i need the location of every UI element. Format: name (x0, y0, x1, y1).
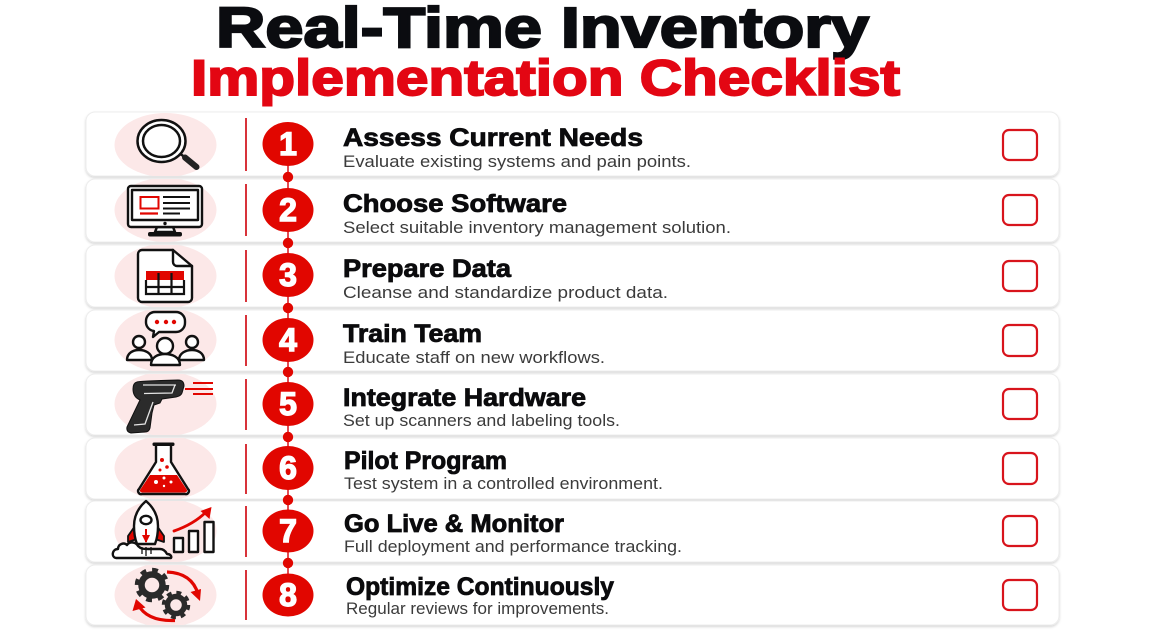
panel: step 7 (86, 499, 1059, 563)
step text: Assess Current Needs (343, 124, 643, 152)
step text (343, 190, 731, 237)
number badge 4: 4 (279, 322, 297, 358)
checkbox (1003, 325, 1037, 356)
icon: team with speech bubble (127, 312, 204, 365)
step text: Evaluate existing systems and pain points. (343, 153, 691, 171)
number badge 6 (262, 446, 314, 490)
number badge 7: 7 (279, 513, 297, 549)
checkbox (1003, 130, 1037, 160)
step text: Cleanse and standardize product data. (343, 284, 668, 302)
panel: step 4 (86, 308, 1059, 372)
number badge 3 (262, 253, 314, 297)
icon: gears with cycle arrows (132, 570, 201, 621)
step text (343, 384, 620, 430)
checkbox (1003, 453, 1037, 484)
number badge 2 (262, 188, 314, 232)
step text (344, 510, 682, 556)
number badge 3: 3 (279, 257, 297, 293)
number badge 8: 8 (279, 577, 297, 613)
icon: barcode scanner (127, 380, 213, 433)
step text: Prepare Data (343, 255, 512, 283)
icon: computer monitor (128, 186, 202, 236)
step text: Optimize Continuously (346, 573, 614, 601)
title (191, 0, 900, 106)
step text: Choose Software (343, 190, 567, 218)
checkbox (1003, 580, 1037, 610)
step text (346, 573, 614, 618)
number badge 1: 1 (279, 126, 297, 162)
number badge 8 (262, 574, 314, 616)
panel: step 1 (86, 112, 1059, 177)
numbered timeline (262, 122, 314, 616)
step text: Set up scanners and labeling tools. (343, 412, 620, 430)
step text: Educate staff on new workflows. (343, 349, 605, 367)
panel: step 6 (86, 436, 1059, 500)
checkbox (1003, 195, 1037, 225)
step text: Regular reviews for improvements. (346, 600, 609, 618)
panel: step 2 (86, 178, 1059, 242)
checkbox (1003, 389, 1037, 419)
checkbox (1003, 261, 1037, 291)
icon: lab flask (138, 442, 189, 494)
panel: step 8 (86, 563, 1059, 627)
step text: Select suitable inventory management solution. (343, 219, 731, 237)
number badge 5: 5 (279, 386, 297, 422)
step text: Full deployment and performance tracking. (344, 538, 682, 556)
title: Implementation Checklist (191, 50, 900, 106)
number badge 2: 2 (279, 192, 297, 228)
step text: Test system in a controlled environment. (344, 475, 663, 493)
checkbox (1003, 516, 1037, 546)
panel: step 5 (86, 372, 1059, 436)
step text: Integrate Hardware (343, 384, 586, 412)
step text: Train Team (343, 320, 482, 348)
icon: magnifying glass (138, 120, 196, 167)
step text (343, 255, 668, 302)
step text: Pilot Program (344, 447, 507, 475)
step text (344, 447, 663, 493)
icon: rocket launch with growth chart (113, 501, 214, 558)
step text: Go Live & Monitor (344, 510, 564, 538)
step text (343, 320, 605, 367)
number badge 7 (262, 510, 314, 552)
number badge 1 (262, 122, 314, 166)
number badge 4 (262, 318, 314, 362)
number badge 6: 6 (279, 450, 297, 486)
icon: spreadsheet document (138, 250, 192, 302)
number badge 5 (262, 382, 314, 426)
panel: step 3 (86, 244, 1059, 308)
step text (343, 124, 691, 171)
